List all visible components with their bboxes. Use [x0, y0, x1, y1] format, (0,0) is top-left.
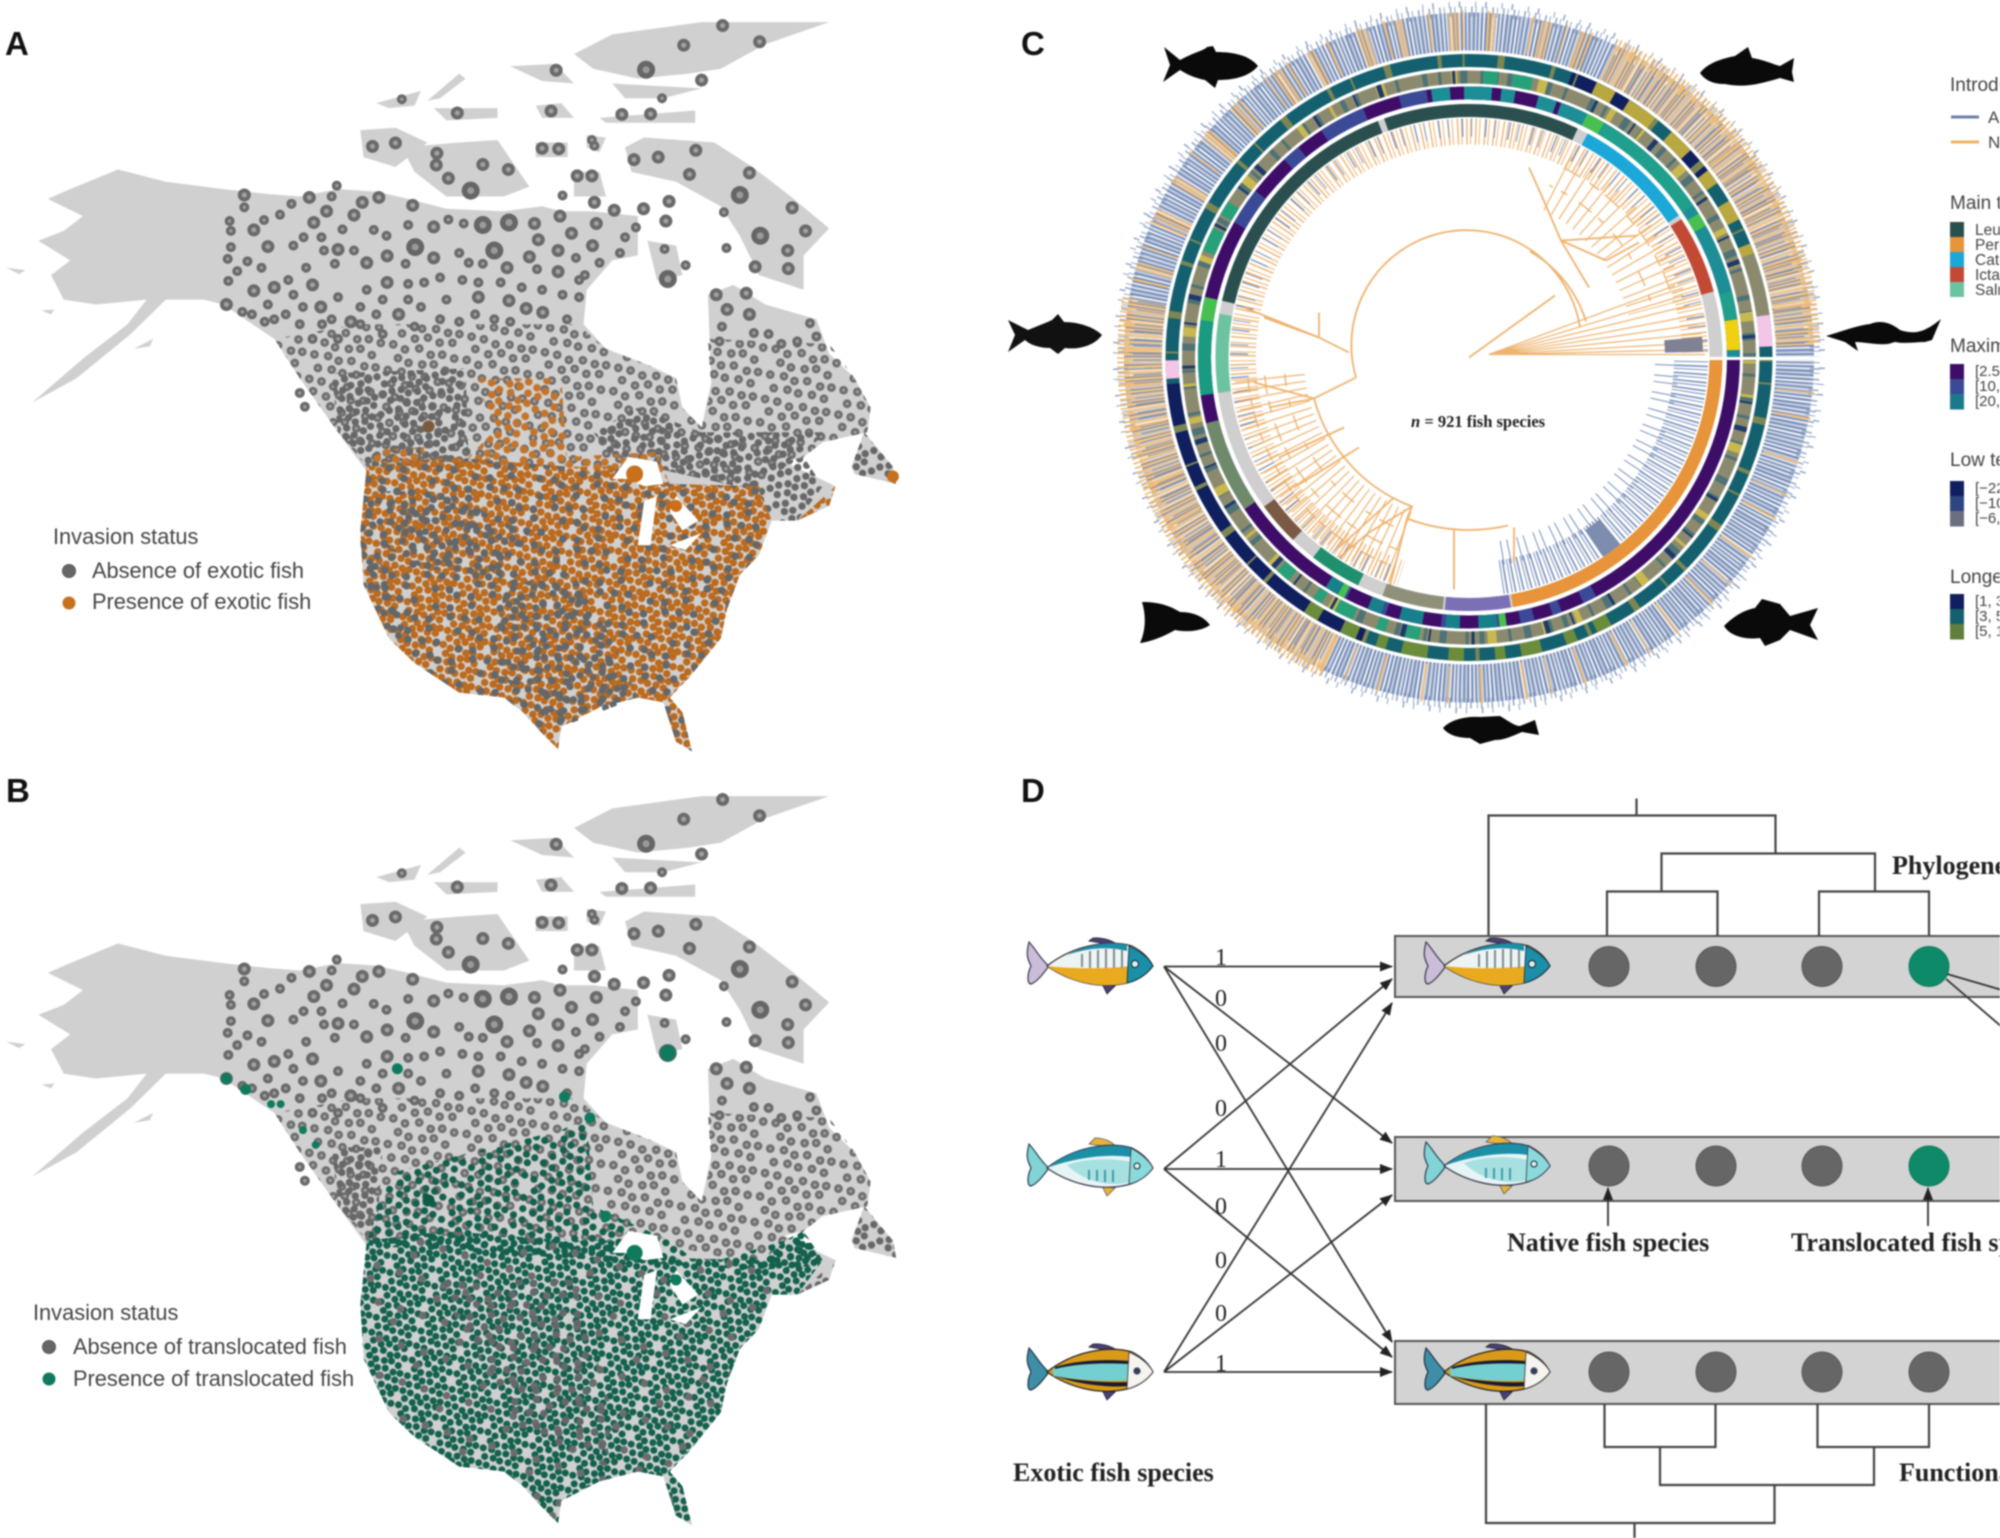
fish silhouette: guppy	[1140, 602, 1210, 643]
ring 4: longevity	[1172, 60, 1766, 654]
panel D: conceptual diagram of exotic fish in communities	[1013, 772, 2000, 1538]
presence and absence values on arrows: 1	[1215, 945, 1227, 971]
species labels	[1013, 1228, 2000, 1487]
community fish icon 1	[1424, 938, 1550, 994]
fish silhouette: goby	[1443, 716, 1539, 744]
outer spikes: introduced and native species	[1116, 4, 1822, 710]
native and translocated species circles	[1589, 946, 1949, 1392]
arrow to native species	[1607, 1188, 1609, 1226]
legend B: invasion status: Presence of translocated fish	[73, 1366, 354, 1391]
community bars	[1395, 936, 2000, 1404]
legend A: invasion status: Absence of exotic fish	[92, 558, 304, 583]
presence and absence values on arrows: 0	[1215, 1031, 1227, 1057]
presence and absence values on arrows: 0	[1215, 1248, 1227, 1274]
presence and absence values on arrows: 1	[1215, 1147, 1227, 1173]
panel B: map of translocated fish invasion status	[6, 772, 896, 1526]
exotic fish icon 1	[1027, 938, 1153, 994]
map A: land and river basin dots	[6, 22, 896, 752]
presence and absence values on arrows: 0	[1215, 1096, 1227, 1122]
panel C: circular phylogenetic tree	[1008, 4, 2000, 744]
presence and absence values on arrows: 0	[1215, 986, 1227, 1012]
panel label B: B	[6, 772, 30, 809]
legend B: invasion status	[33, 1300, 354, 1391]
legend: low temperature	[1950, 450, 2000, 527]
fish silhouette: sturgeon	[1826, 319, 1941, 351]
legend B: invasion status: Invasion status	[33, 1300, 178, 1325]
legend A: invasion status	[53, 524, 311, 614]
legend: longevity	[1950, 567, 2000, 640]
lines from translocated species	[1946, 974, 2000, 1027]
ring 1: main taxonomic families	[1222, 110, 1716, 604]
species count: n = 921 fish species	[1411, 412, 1546, 431]
inner blue clade bars	[1254, 142, 1684, 572]
panel label D: D	[1021, 772, 1045, 809]
legend B: invasion status: Absence of translocated fish	[73, 1334, 347, 1359]
species labels: Exotic fish species	[1013, 1458, 1214, 1487]
presence and absence values on arrows	[1215, 945, 1227, 1377]
legend A: invasion status: Invasion status	[53, 524, 198, 549]
panel A: map of exotic fish invasion status	[5, 22, 896, 752]
functional tree	[1486, 1404, 1929, 1538]
presence and absence values on arrows: 0	[1215, 1301, 1227, 1327]
exotic fish icon 2	[1027, 1138, 1153, 1196]
ring 3: low temperature tolerance	[1188, 77, 1750, 638]
community fish icon 2	[1424, 1136, 1550, 1194]
fan of long branches	[1489, 286, 1705, 354]
arrows from exotic fish to communities	[1164, 966, 1392, 1372]
fish silhouette: top right	[1700, 47, 1794, 86]
presence and absence values on arrows: 1	[1215, 1351, 1227, 1377]
legend: maximum body length	[1950, 336, 2000, 410]
fish silhouette: left	[1008, 314, 1102, 354]
fish silhouette: top left	[1163, 46, 1258, 88]
legend: main taxonomic families	[1950, 193, 2000, 299]
phylogenetic tree	[1488, 798, 1929, 936]
backbone branches	[1244, 168, 1639, 590]
inner fine tree tips	[1239, 128, 1699, 588]
gap in the circular tree	[1660, 357, 1840, 360]
community fish icon 3	[1424, 1344, 1550, 1400]
map B: land and river basin dots	[6, 796, 896, 1526]
exotic fish icon 3	[1027, 1344, 1153, 1400]
legend: introduction status	[1950, 75, 2000, 152]
fish silhouette: perch	[1724, 599, 1818, 646]
species labels: Native fish species	[1507, 1228, 1709, 1257]
ring 2: maximum body length	[1204, 93, 1734, 622]
phylogeny branches and trait rings	[1116, 4, 1822, 710]
legend A: invasion status: Presence of exotic fish	[92, 589, 311, 614]
presence and absence values on arrows: 0	[1215, 1194, 1227, 1220]
panel label A: A	[5, 25, 29, 62]
arrow to translocated species	[1927, 1188, 1929, 1226]
panel label C: C	[1021, 25, 1045, 62]
tree labels	[1892, 851, 2000, 1487]
